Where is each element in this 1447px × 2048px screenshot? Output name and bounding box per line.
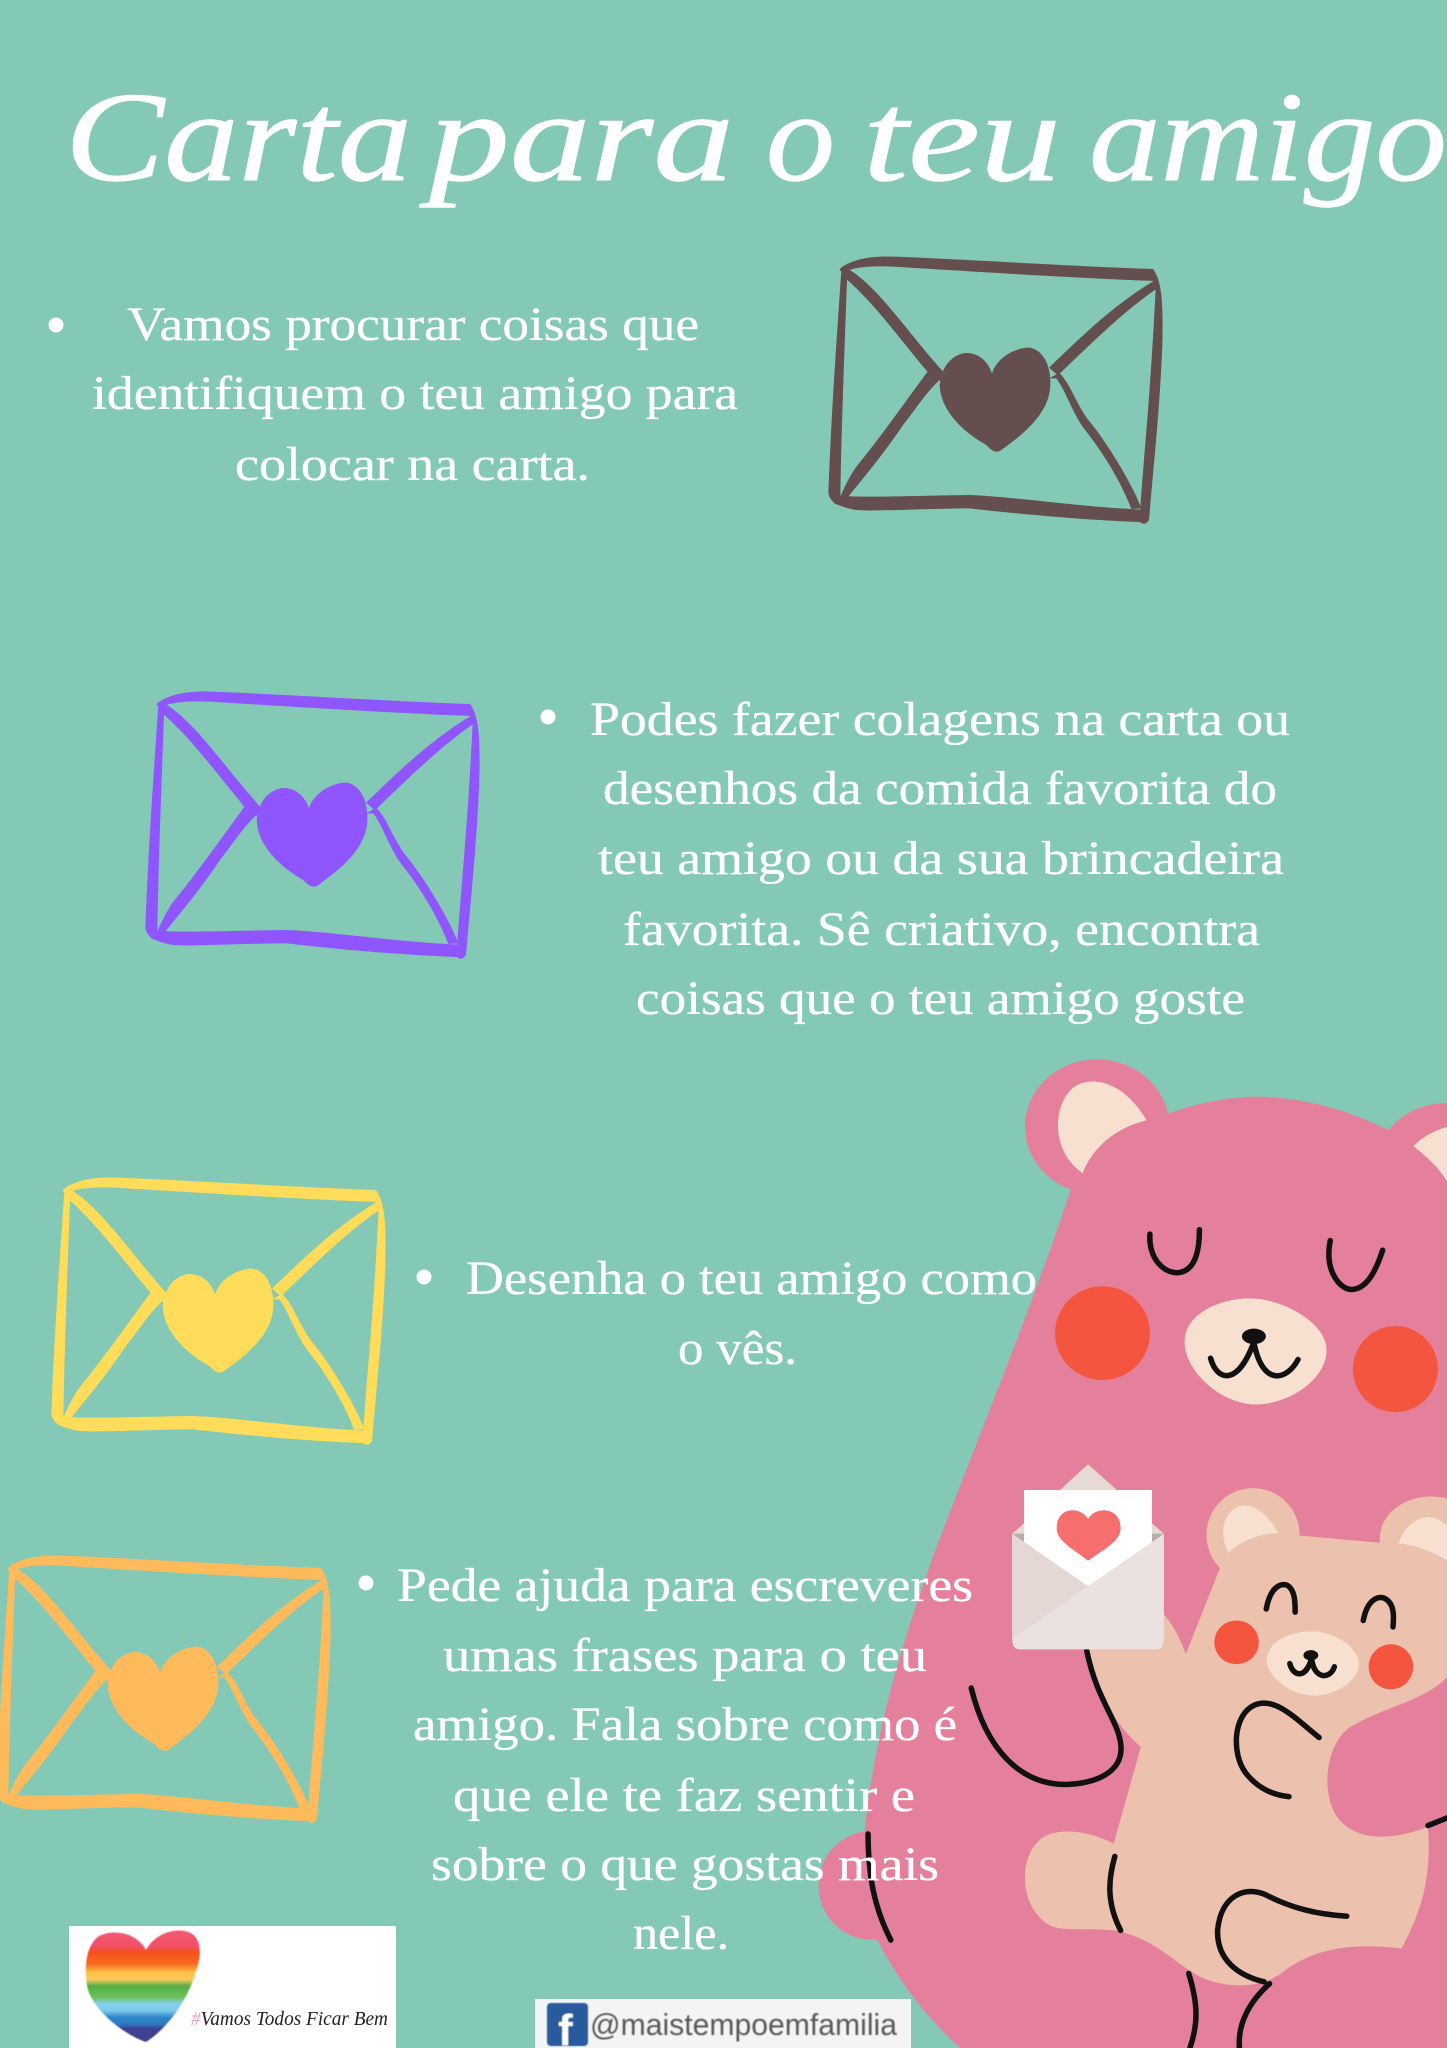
text block: step 4: Pede ajuda para escreveres [397,1559,973,1612]
text block: step 2 [540,693,1290,1025]
text block: step 1: colocar na carta. [235,438,590,491]
text block: step 2: desenhos da comida favorita do [603,762,1277,815]
icon: yellow envelope [51,1178,386,1445]
icon: brown envelope [828,257,1163,524]
text block: step 4: sobre o que gostas mais [431,1838,939,1891]
icon: open envelope with heart [1012,1464,1164,1649]
title: Carta [65,66,412,208]
text block: step 4: umas frases para o teu [443,1629,927,1682]
text block: step 4 [358,1559,973,1960]
title [65,66,1447,208]
icon: facebook [547,2003,588,2048]
title: teu [863,66,1061,208]
icon: purple envelope [145,692,480,959]
text block: step 4: que ele te faz sentir e [453,1769,915,1822]
text block: step 1 [48,298,738,491]
text block: step 3: o vês. [678,1322,797,1375]
text block: step 1: identifiquem o teu amigo para [92,367,738,420]
logo: Vamos Todos Ficar Bem [69,1926,396,2048]
text block: step 4: nele. [633,1907,729,1960]
logo caption: #Vamos Todos Ficar Bem [191,2008,388,2030]
text block: step 3: Desenha o teu amigo como [466,1252,1037,1305]
title: amigo [1089,66,1447,208]
text block: step 3 [416,1252,1037,1375]
text block: step 2: teu amigo ou da sua brincadeira [598,832,1284,885]
icon: orange envelope [0,1556,331,1823]
title: para [419,66,734,208]
text block: step 1: Vamos procurar coisas que [127,298,699,351]
icon: rainbow heart [86,1930,200,2042]
facebook handle badge [535,1999,911,2048]
facebook handle: @maistempoemfamilia [590,2007,898,2042]
text block: step 2: Podes fazer colagens na carta ou [590,693,1290,746]
text block: step 2: coisas que o teu amigo goste [636,972,1245,1025]
text block: step 2: favorita. Sê criativo, encontra [623,903,1260,956]
small beige bear [868,1488,1447,2048]
illustration: bears with letter [819,1059,1447,2048]
text block: step 4: amigo. Fala sobre como é [413,1698,957,1751]
title: o [766,66,835,208]
big pink bear [819,1059,1447,2048]
